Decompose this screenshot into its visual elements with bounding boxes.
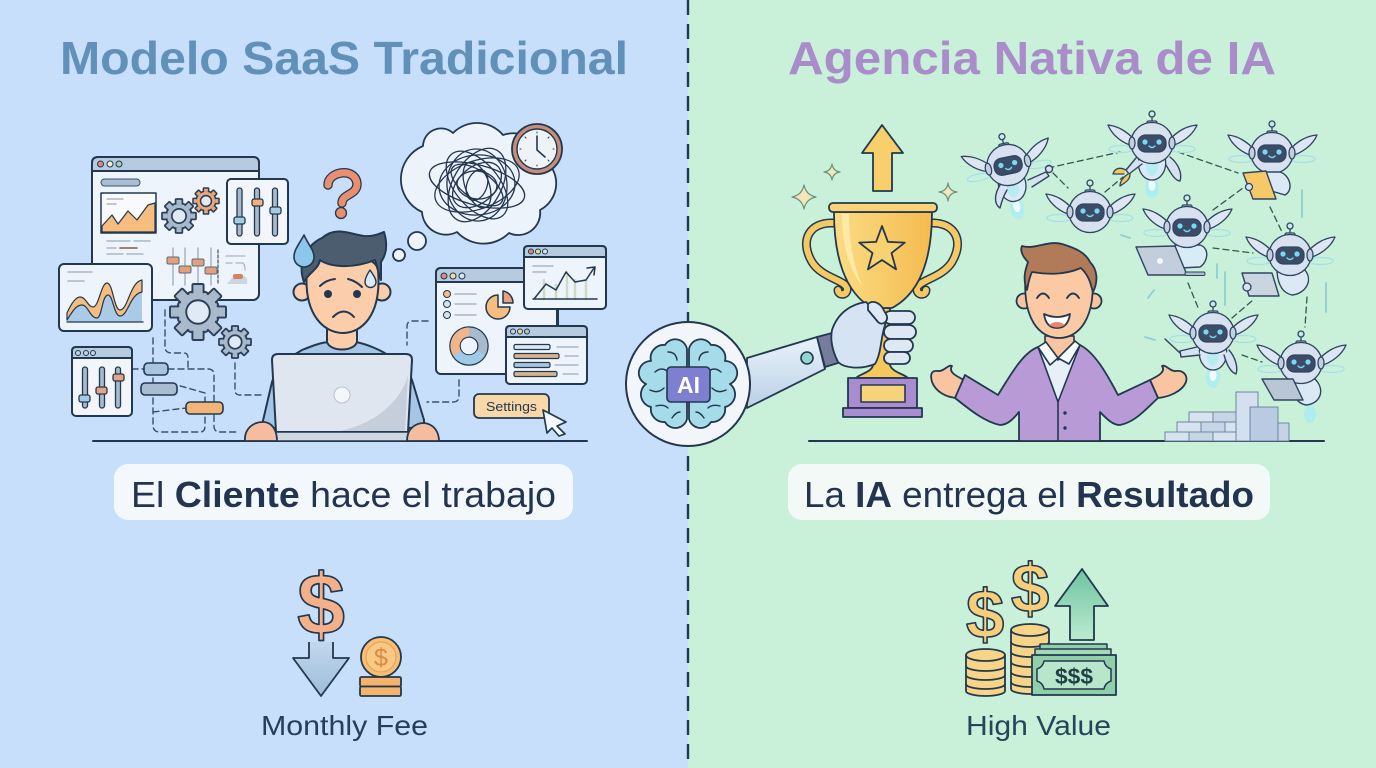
panel: bottom sliders window bbox=[72, 347, 132, 416]
center dashed divider bbox=[687, 0, 689, 768]
callout: left statement bbox=[114, 464, 573, 520]
left hand bbox=[931, 366, 964, 398]
smiling eyes bbox=[1037, 294, 1079, 298]
green up arrow bbox=[1055, 569, 1108, 640]
frown bbox=[333, 312, 354, 317]
stem bbox=[856, 308, 908, 378]
robot 1 bbox=[958, 124, 1063, 228]
shirt and arms bbox=[262, 342, 424, 428]
window: reports with charts bbox=[436, 268, 557, 374]
label: High Value: High Value bbox=[966, 710, 1111, 741]
icon: large gears bbox=[170, 284, 251, 358]
neck bbox=[1045, 336, 1074, 360]
panel: right background bbox=[688, 0, 1376, 768]
shirt bbox=[1038, 345, 1080, 402]
hair bbox=[302, 232, 386, 282]
window: main dashboard bbox=[92, 157, 259, 300]
coin stack tall bbox=[1011, 624, 1049, 694]
callout: left statement: El Cliente hace el trabajo bbox=[131, 474, 556, 515]
button: Settings: Settings bbox=[486, 399, 538, 414]
hair bbox=[1021, 243, 1096, 292]
ears bbox=[294, 284, 310, 300]
donut chart bbox=[455, 332, 483, 360]
sparkles bbox=[792, 164, 957, 209]
title: right: Agencia Nativa de IA bbox=[788, 32, 1276, 84]
brain bbox=[639, 339, 737, 428]
icon: high value: $ bbox=[1011, 550, 1049, 627]
icon: question mark bbox=[328, 173, 357, 218]
icon: high value: $$$ bbox=[1055, 664, 1093, 689]
laptop bbox=[272, 354, 412, 432]
dollar signs: $ bbox=[966, 576, 1004, 653]
person: happy user bbox=[931, 243, 1186, 441]
connector between windows bbox=[557, 309, 559, 327]
callout: right statement: La IA entrega el Resultado bbox=[804, 474, 1254, 515]
face bbox=[307, 255, 378, 333]
dollar sign: $ bbox=[297, 557, 345, 653]
robot 7 with pointer bbox=[1165, 301, 1258, 388]
smile bbox=[1044, 314, 1070, 328]
star bbox=[859, 226, 905, 269]
robot 8 with tablet bbox=[1257, 331, 1346, 423]
ground line right bbox=[809, 440, 1324, 442]
down arrow bbox=[293, 642, 349, 696]
robot 2 with claw bbox=[1108, 111, 1197, 198]
icon: monthly fee: $ bbox=[374, 644, 388, 672]
banknotes bbox=[1040, 644, 1107, 652]
panel: wave chart bbox=[59, 264, 152, 331]
robot arm holding trophy bbox=[747, 302, 916, 408]
title: left: Modelo SaaS Tradicional bbox=[60, 32, 628, 84]
icon: clock bbox=[512, 124, 562, 174]
robot 5 with laptop bbox=[1136, 195, 1232, 276]
eyes and brows bbox=[324, 290, 332, 298]
illustration: AI-native agency scene bbox=[626, 111, 1346, 446]
ground line left bbox=[93, 440, 587, 442]
collar bbox=[1038, 341, 1080, 365]
motion lines bbox=[1121, 190, 1326, 340]
icon: monthly fee bbox=[293, 557, 401, 696]
icon: AI brain circle: AI bbox=[677, 372, 700, 398]
ears bbox=[1016, 294, 1032, 308]
handles bbox=[806, 223, 958, 294]
illustration: traditional SaaS scene bbox=[59, 123, 606, 441]
robot 3 with clipboard bbox=[1228, 121, 1317, 199]
neck bbox=[327, 328, 357, 350]
icon: trophy bbox=[806, 203, 958, 417]
window: line chart bbox=[524, 246, 606, 309]
coin stack small bbox=[966, 649, 1005, 696]
face bbox=[1025, 255, 1093, 338]
icon: AI brain circle bbox=[626, 322, 750, 446]
window: bar list bbox=[506, 326, 587, 384]
scribble bbox=[424, 138, 530, 232]
panel: top sliders bbox=[227, 179, 288, 244]
icon: mouse cursor bbox=[543, 410, 566, 436]
hands bbox=[245, 422, 277, 441]
panel: left background bbox=[0, 0, 688, 768]
thought bubble with tangled scribble bbox=[393, 123, 562, 261]
button: Settings bbox=[474, 394, 549, 418]
sweat drops bbox=[294, 235, 314, 267]
inner mixer sliders bbox=[167, 248, 217, 285]
icon: small window gears bbox=[162, 188, 219, 233]
right hand bbox=[1150, 366, 1186, 398]
rim bbox=[829, 203, 937, 212]
icon: up arrow over trophy bbox=[862, 125, 903, 191]
coin bbox=[361, 637, 401, 677]
callout: right statement bbox=[788, 464, 1270, 520]
label: Monthly Fee: Monthly Fee bbox=[261, 710, 428, 741]
robot 6 with tablet bbox=[1242, 223, 1335, 296]
dashed connectors left bbox=[132, 310, 459, 432]
base bbox=[848, 378, 917, 408]
icon: high value bbox=[966, 550, 1116, 696]
blocks and bars bbox=[1165, 392, 1289, 441]
pie chart bbox=[486, 295, 510, 319]
robot 4 bbox=[1046, 180, 1135, 232]
torso and arms bbox=[955, 345, 1158, 441]
flow nodes bbox=[141, 363, 223, 414]
person: stressed user bbox=[245, 232, 439, 441]
cup bbox=[834, 212, 932, 308]
network dashed links bbox=[1048, 152, 1307, 362]
